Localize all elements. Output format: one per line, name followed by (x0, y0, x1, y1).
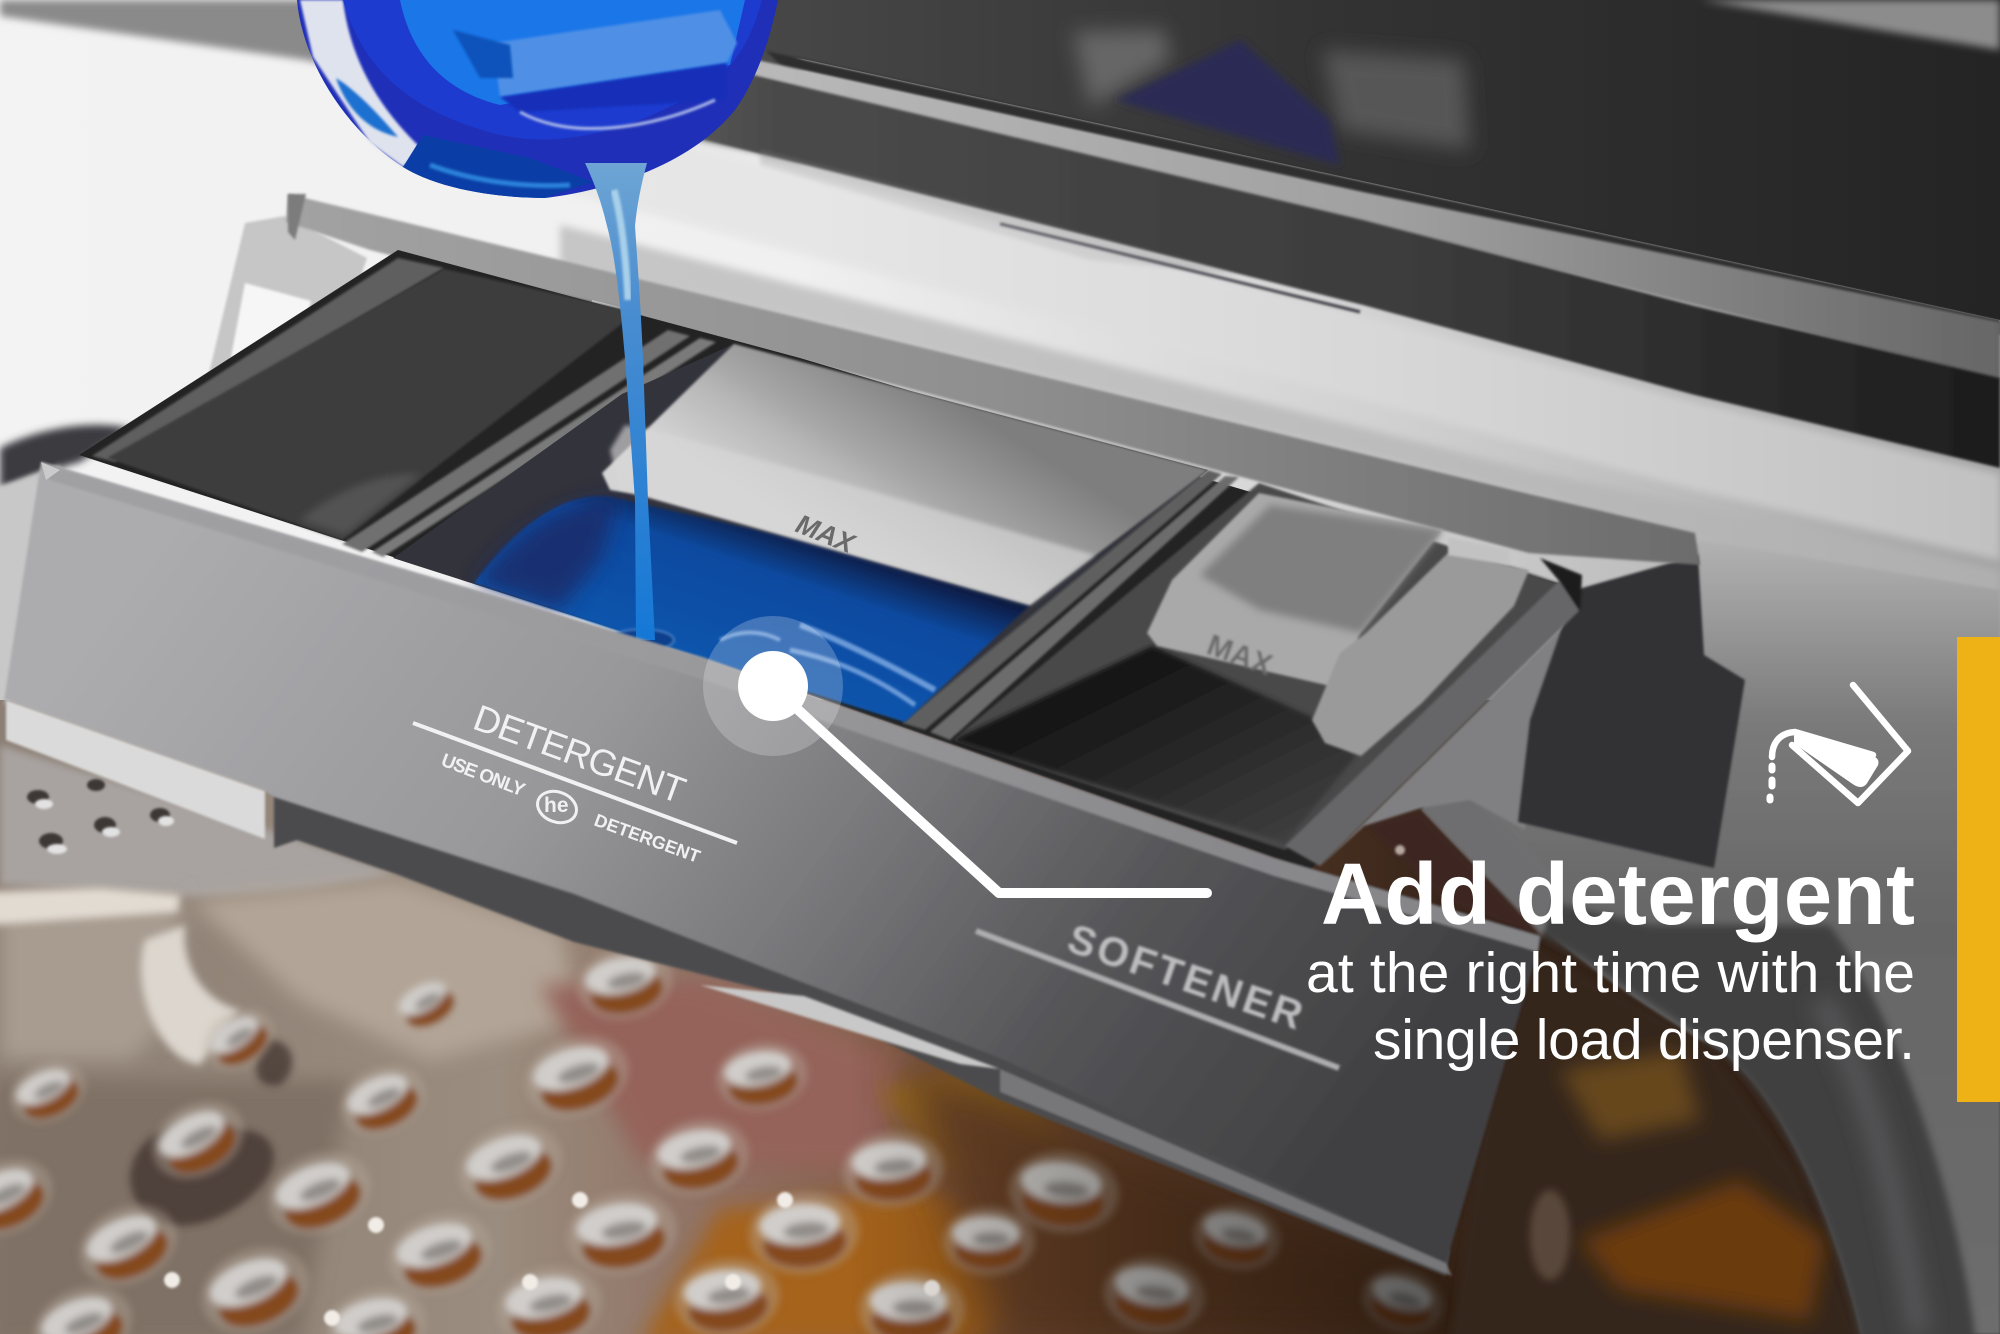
yellow accent bar (1957, 637, 2000, 1102)
detergent cup (297, 0, 778, 198)
detergent MAX tray (602, 344, 1208, 605)
detergent MAX tray: MAX (792, 509, 860, 560)
chrome strip on drawer corner (6, 700, 265, 839)
heading: Add detergent (1321, 846, 1915, 943)
drawer underside shadow (274, 790, 1450, 1276)
body text: at the right time with the (1306, 941, 1915, 1005)
drawer label: DETERGENT: DETERGENT (592, 810, 703, 867)
drawer label: DETERGENT: USE ONLY (438, 750, 528, 801)
wedge behind drawer rail (1320, 600, 1590, 866)
dark rubber curve at left (0, 425, 130, 492)
dispenser compartments (79, 250, 1580, 870)
drawer label: DETERGENT (413, 697, 737, 867)
drawer label: SOFTENER (976, 915, 1339, 1068)
softener tray (1147, 493, 1582, 866)
softener tray: MAX (1203, 629, 1277, 682)
body text: single load dispenser. (1373, 1008, 1915, 1072)
drawer label: DETERGENT: he (544, 794, 569, 817)
drum with perforations and laundry (0, 700, 2000, 1334)
blue detergent pool (474, 496, 1030, 722)
callout: leader marker and line (703, 616, 1207, 893)
drawer front panel (3, 462, 1542, 1276)
callout leader line (795, 707, 1207, 893)
body text (1306, 941, 1915, 1072)
detergent stream (585, 163, 655, 640)
icon: tilted pouring cup (1770, 685, 1908, 803)
callout dot (738, 651, 808, 721)
drawer rail and bracket (209, 194, 1700, 565)
grey panel below left curve (0, 465, 60, 760)
dark support arm (1518, 555, 1745, 868)
drawer label: DETERGENT: DETERGENT (468, 697, 691, 811)
callout halo (703, 616, 843, 756)
drawer label: SOFTENER: SOFTENER (1062, 915, 1309, 1038)
washer right body and lid edge (1364, 540, 2000, 1334)
